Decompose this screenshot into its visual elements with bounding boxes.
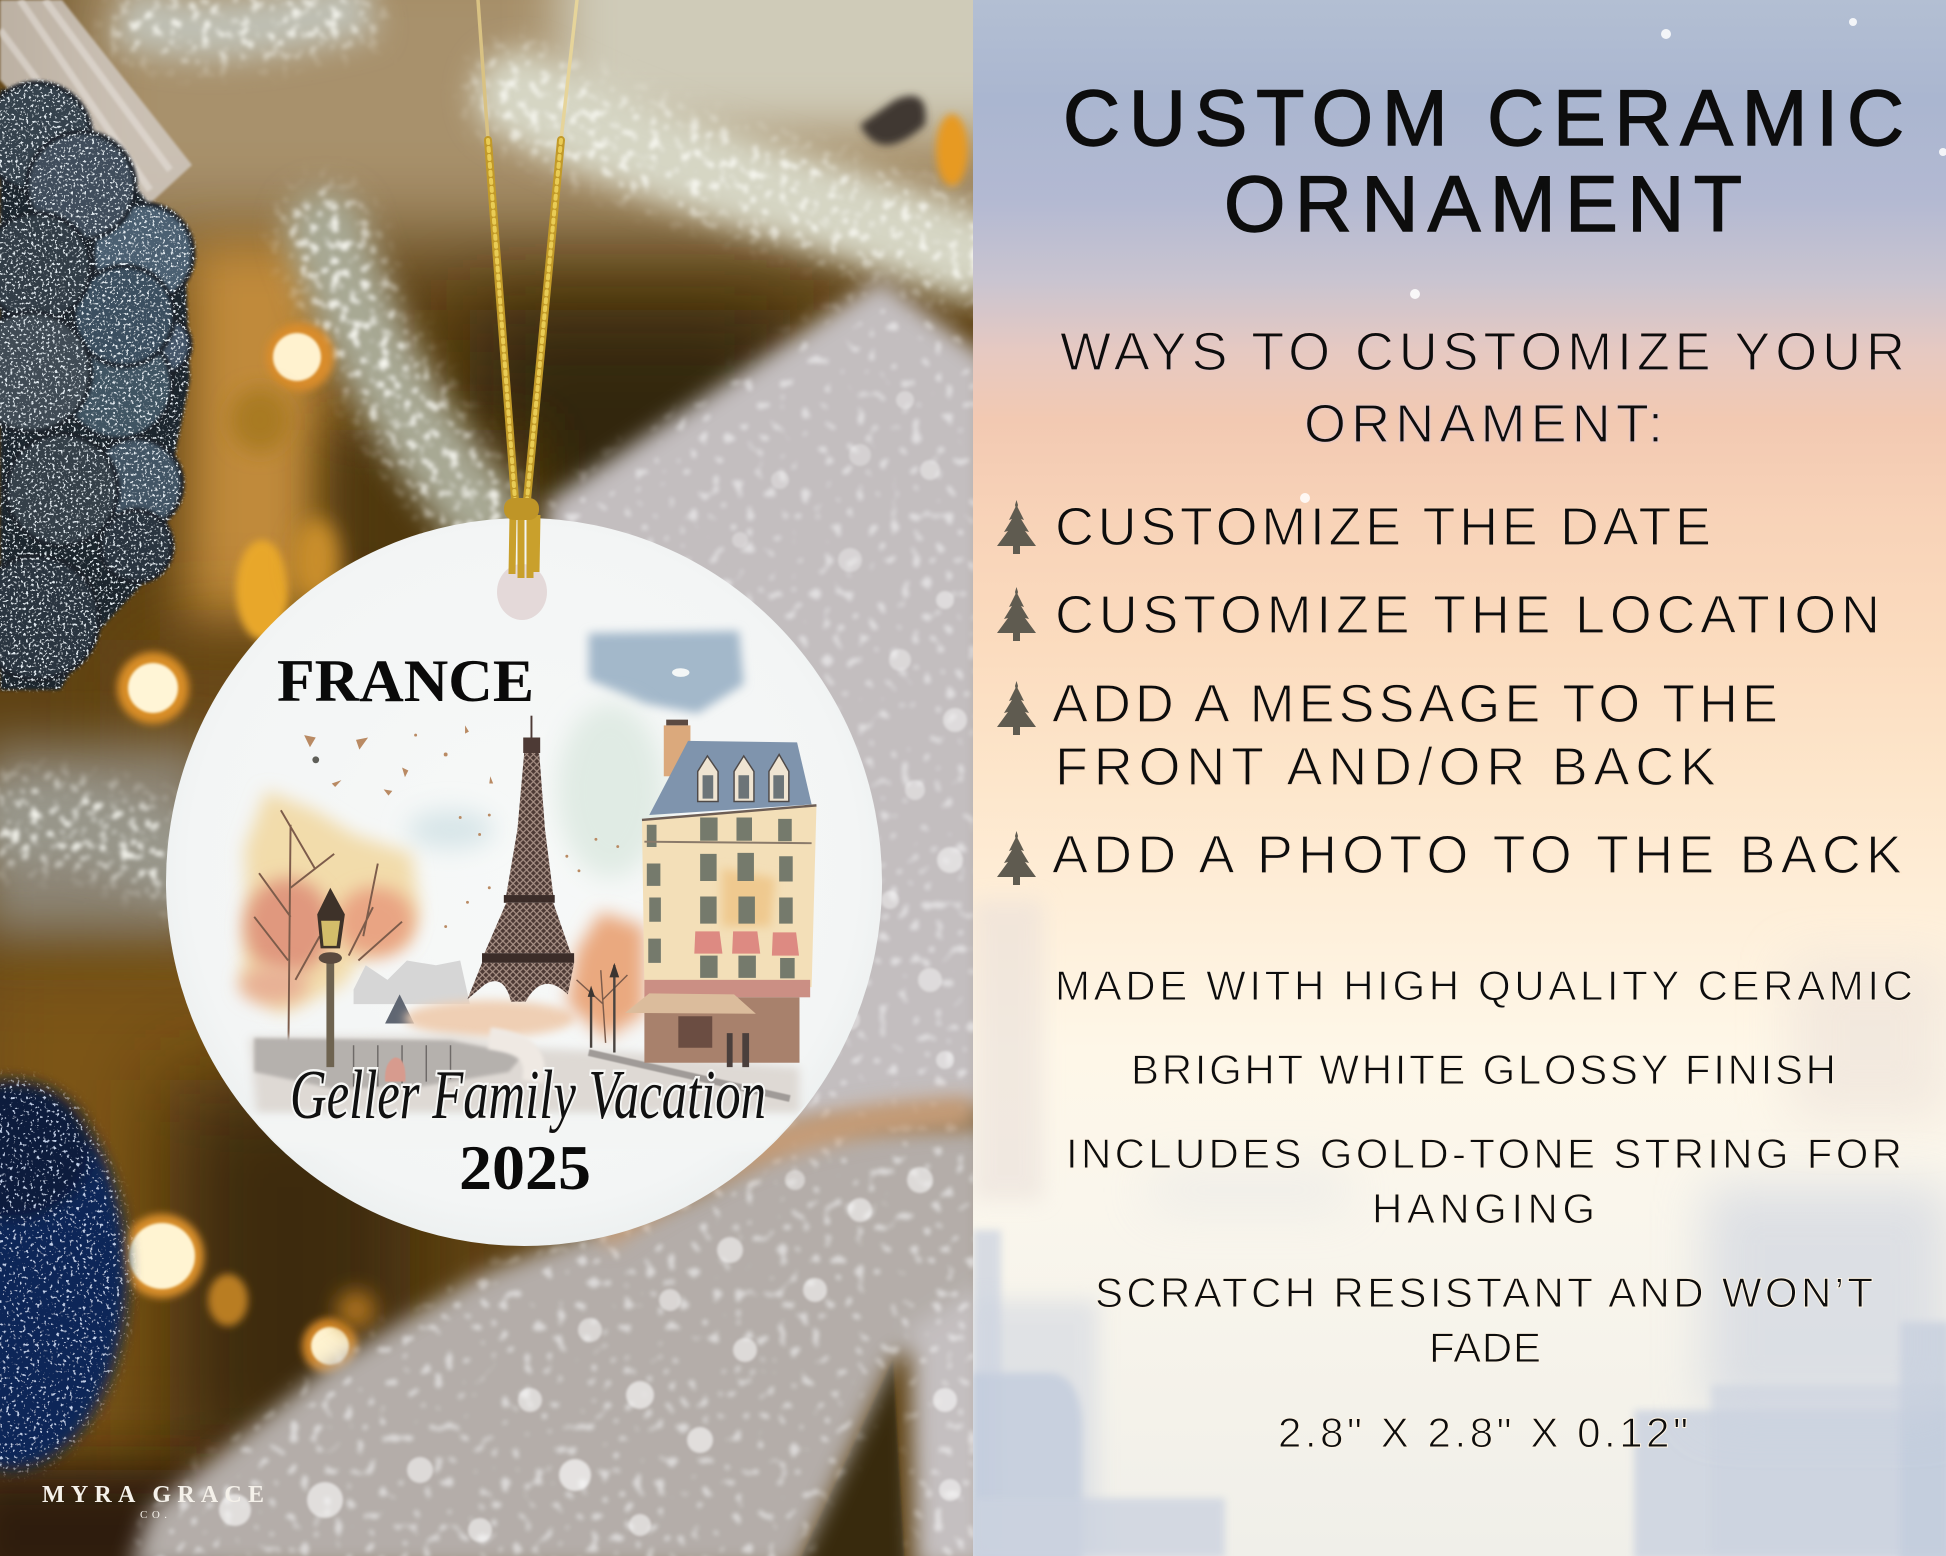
panel: product photo	[0, 0, 1060, 1556]
sky washes	[407, 631, 744, 878]
brand logo	[42, 1482, 264, 1521]
ribbon peach edge	[600, 1112, 973, 1235]
spec: durability	[1095, 1269, 1873, 1371]
bokeh lights	[117, 114, 968, 1374]
hanging hole	[497, 564, 547, 620]
spec: string	[1066, 1130, 1902, 1232]
list item: date: CUSTOMIZE THE DATE	[1055, 497, 1711, 557]
deep blue ornament	[0, 1080, 128, 1470]
ornament text: family name: Geller Family Vacation	[290, 1057, 766, 1134]
watercolor sky and city background	[973, 0, 1946, 1556]
ornament text: year: 2025	[459, 1132, 591, 1203]
right autumn tree	[567, 912, 644, 1038]
eiffel tower	[467, 716, 574, 1002]
spec: string: HANGING	[1372, 1185, 1595, 1232]
title	[1063, 73, 1904, 248]
gold hanging string	[478, 0, 577, 500]
left autumn tree	[240, 791, 419, 1077]
spec: durability: FADE	[1429, 1324, 1541, 1371]
flocked branches	[0, 5, 968, 870]
list item: location: CUSTOMIZE THE LOCATION	[1055, 585, 1880, 645]
spec: material: MADE WITH HIGH QUALITY CERAMIC	[1055, 962, 1913, 1009]
street lamps	[317, 888, 619, 1067]
spec: finish: BRIGHT WHITE GLOSSY FINISH	[1131, 1046, 1836, 1093]
spec: string: INCLUDES GOLD-TONE STRING FOR	[1066, 1130, 1902, 1177]
pale trees	[404, 1000, 574, 1037]
silver glitter ribbon, upper	[546, 279, 990, 1190]
title: CUSTOM CERAMIC	[1063, 73, 1904, 162]
gold cord knot	[504, 498, 539, 578]
ribbon sparkle highlights	[219, 391, 967, 1542]
photo background: blurred tree	[0, 0, 1060, 1556]
bottom fade	[223, 1115, 838, 1149]
title: ORNAMENT	[1224, 159, 1742, 248]
street and quay	[249, 1036, 799, 1116]
distant rooftops	[354, 960, 470, 1023]
stars	[1300, 18, 1946, 503]
parisian building	[625, 720, 816, 1067]
silver glitter ribbon, lower	[130, 1125, 990, 1556]
customization list	[997, 497, 1902, 885]
blue glitter ornament cluster	[0, 83, 193, 690]
ceramic ornament	[166, 498, 882, 1246]
organza ribbon	[0, 0, 192, 222]
list item: message: FRONT AND/OR BACK	[1055, 737, 1716, 797]
subheading: ORNAMENT:	[1304, 394, 1663, 454]
spec: dimensions: 2.8" X 2.8" X 0.12"	[1278, 1409, 1688, 1456]
flying leaves	[304, 725, 619, 928]
spec: durability: SCRATCH RESISTANT AND WON’T	[1095, 1269, 1873, 1316]
ornament text: FRANCE: FRANCE	[277, 648, 534, 714]
subheading	[1060, 322, 1905, 454]
watercolor illustration	[223, 631, 838, 1149]
brand logo: CO.	[140, 1509, 167, 1521]
panel: product details	[973, 0, 1946, 1556]
product specifications	[1055, 962, 1913, 1456]
subheading: WAYS TO CUSTOMIZE YOUR	[1060, 322, 1905, 382]
list item: photo: ADD A PHOTO TO THE BACK	[1052, 825, 1902, 885]
ornament disc	[166, 518, 882, 1246]
list item: message: ADD A MESSAGE TO THE	[1052, 674, 1778, 734]
list item: message	[997, 674, 1778, 797]
brand logo: MYRA GRACE	[42, 1482, 264, 1508]
